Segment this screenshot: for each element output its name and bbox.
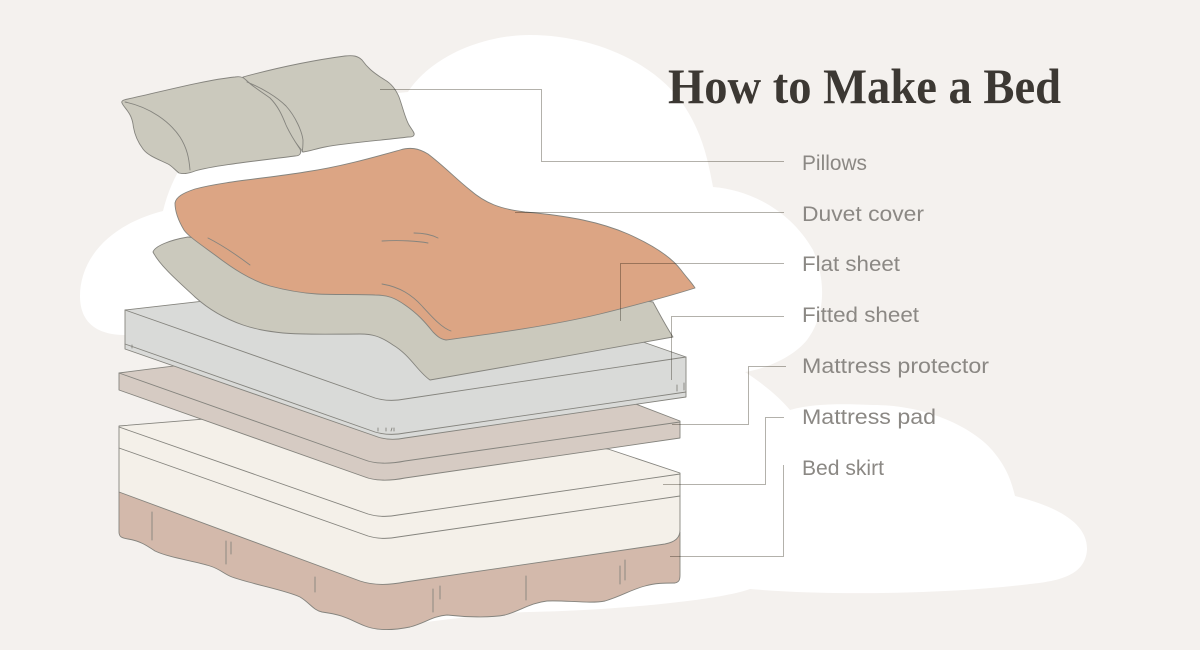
protector seam lines — [125, 310, 686, 434]
mattress protector layer — [125, 290, 686, 439]
front pillow — [122, 77, 301, 174]
label: fitted sheet: Fitted sheet — [802, 304, 919, 327]
bed skirt layer — [119, 492, 680, 630]
protector stitch marks — [132, 345, 684, 431]
mattress pad layer — [119, 350, 680, 480]
pillows — [122, 56, 414, 174]
label: mattress pad: Mattress pad — [802, 406, 936, 429]
duvet cover layer — [175, 148, 695, 340]
pad seam line — [119, 373, 680, 463]
skirt pleats — [152, 512, 625, 612]
label: pillows: Pillows — [802, 152, 867, 175]
bed base (box spring) — [119, 408, 680, 584]
label: bed skirt: Bed skirt — [802, 457, 884, 480]
title: How to Make a Bed — [668, 58, 1061, 114]
base seam lines — [119, 427, 680, 538]
label: flat sheet: Flat sheet — [802, 253, 900, 276]
background cloud shape — [80, 35, 1087, 625]
flat sheet layer — [153, 237, 673, 380]
label: duvet cover: Duvet cover — [802, 203, 924, 226]
label: mattress protector: Mattress protector — [802, 355, 989, 378]
leader lines — [380, 90, 786, 556]
pillow fold lines — [125, 82, 303, 170]
duvet fold lines — [208, 233, 451, 331]
back pillow — [243, 56, 414, 152]
